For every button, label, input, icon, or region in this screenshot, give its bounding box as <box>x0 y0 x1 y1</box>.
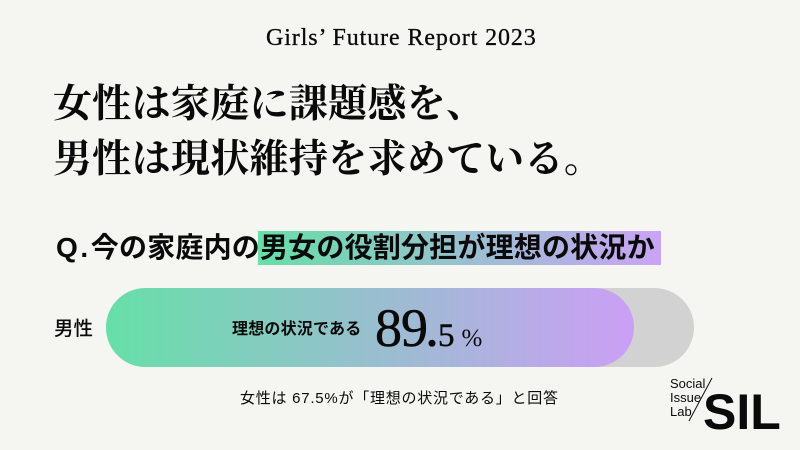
logo small text: Issue <box>670 390 701 405</box>
main heading: 女性は家庭に課題感を、 <box>53 83 485 126</box>
question highlight <box>258 231 661 265</box>
row label: male: 男性 <box>54 318 93 340</box>
main heading: 男性は現状維持を求めている。 <box>53 138 603 181</box>
footnote: 女性は 67.5%が「理想の状況である」と回答 <box>240 390 559 407</box>
bar fill <box>106 288 634 367</box>
value: 89.5 % <box>375 298 482 358</box>
logo large text: SIL <box>703 384 781 440</box>
question <box>56 231 661 265</box>
bar chart: male 89.5% <box>106 288 694 367</box>
logo small text <box>670 376 705 419</box>
logo: Social Issue Lab SIL <box>670 376 781 440</box>
main heading <box>53 83 603 181</box>
report title: Girls’ Future Report 2023 <box>266 25 537 51</box>
bar track <box>106 288 694 367</box>
logo small text: Social <box>670 376 705 391</box>
bar label: 理想の状況である <box>232 321 361 338</box>
question text: Q.今の家庭内の男女の役割分担が理想の状況か <box>56 232 655 263</box>
logo small text: Lab <box>670 404 692 419</box>
logo slash <box>688 378 712 422</box>
